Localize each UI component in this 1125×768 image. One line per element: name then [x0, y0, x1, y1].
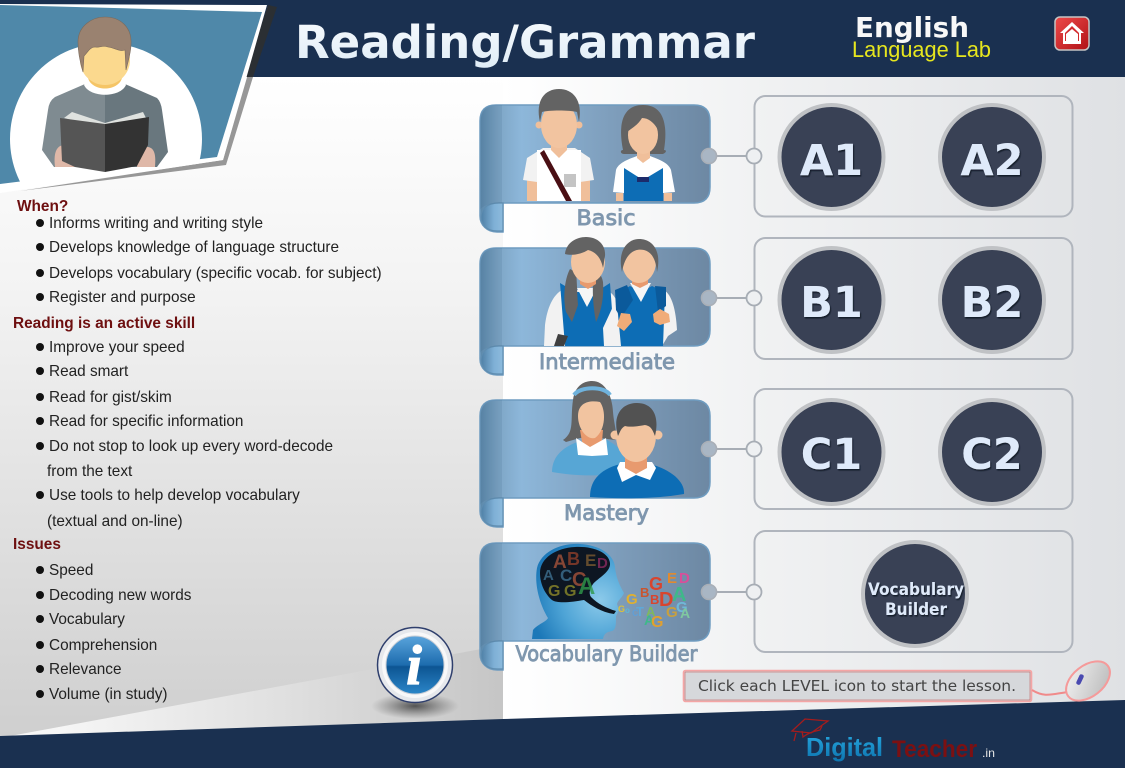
connector: mastery	[702, 442, 762, 456]
spoken letters: B	[650, 592, 659, 607]
scroll banner: basic	[480, 105, 710, 232]
spoken letters: E	[667, 570, 677, 587]
text block: issues	[13, 536, 192, 703]
icon: basic students	[523, 89, 675, 201]
button: vocabulary builder	[863, 542, 967, 646]
button: B2	[940, 248, 1044, 352]
brain letters: B	[567, 549, 580, 569]
button: B2: B2	[961, 278, 1023, 328]
logo: Digital Teacher	[792, 719, 995, 763]
panel: levels B	[754, 238, 1072, 359]
spoken letters: G	[676, 599, 688, 616]
brain letters	[543, 549, 608, 600]
spoken letters: A	[680, 605, 690, 621]
brain letters: C	[560, 566, 572, 585]
spoken letters: D	[679, 570, 690, 587]
brain letters: A	[543, 567, 554, 584]
button: C2	[940, 400, 1044, 504]
spoken letters: G	[649, 574, 663, 594]
brand: English Language Lab: Language Lab	[852, 37, 991, 62]
spoken letters: A	[672, 584, 686, 606]
brain letters: G	[548, 583, 560, 600]
list: issues items: Speed	[49, 562, 93, 579]
spoken letters: D	[659, 589, 673, 611]
spoken letters	[618, 570, 690, 631]
list: issues items: Comprehension	[49, 637, 157, 654]
scroll banner: mastery	[480, 400, 710, 527]
list: reading items: from the text	[47, 463, 133, 480]
spoken letters: B	[640, 585, 649, 600]
label: basic: Basic	[576, 206, 636, 230]
text block: reading is an active skill	[13, 315, 333, 530]
list: issues items: Vocabulary	[49, 611, 125, 628]
button: C1: C1	[801, 430, 862, 480]
button: A1: A1	[800, 136, 863, 186]
list: when items: Develops knowledge of language structure	[49, 239, 339, 256]
list: reading items: Read for specific information	[49, 413, 243, 430]
brain letters: C	[572, 569, 586, 591]
scroll banner: intermediate	[480, 248, 710, 375]
icon: info button	[371, 628, 459, 719]
logo: Digital Teacher: Digital	[806, 732, 883, 762]
spoken letters: G	[651, 614, 663, 631]
panel: intermediate	[480, 237, 710, 375]
button: A2: A2	[960, 136, 1024, 186]
label: intermediate: Intermediate	[539, 350, 675, 374]
panel: vocabulary builder level	[754, 531, 1072, 652]
brand: English Language Lab	[852, 11, 991, 62]
list: issues items: Volume (in study)	[49, 686, 168, 703]
brain letters: G	[564, 583, 576, 600]
list: when items: Informs writing and writing style	[49, 215, 263, 232]
connector: vocabulary builder	[702, 584, 762, 600]
icon: mastery people	[552, 381, 684, 498]
brand: English Language Lab: English	[855, 11, 969, 44]
spoken letters: G	[618, 604, 625, 614]
button: B1	[780, 248, 884, 352]
button: A2	[940, 105, 1044, 209]
brain letters: D	[597, 555, 608, 572]
label: mastery: Mastery	[564, 501, 649, 525]
list: reading items: Improve your speed	[49, 339, 185, 356]
spoken letters: T	[636, 604, 644, 619]
spoken letters: A	[646, 604, 656, 619]
panel: mastery	[480, 381, 710, 527]
list: issues items: Relevance	[49, 661, 122, 678]
icon: reader	[42, 17, 168, 172]
button: vocabulary builder: Builder	[885, 600, 948, 620]
heading: issues: Issues	[13, 536, 61, 553]
logo: Digital Teacher: .in	[982, 746, 995, 760]
icon: info button: i	[406, 635, 422, 697]
callout: click instruction: Click each LEVEL icon to start the lesson.	[698, 677, 1016, 695]
button: A1	[780, 105, 884, 209]
list: reading items	[36, 339, 333, 530]
panel: levels C	[754, 389, 1072, 509]
spoken letters: o	[625, 606, 630, 615]
icon: head with letters	[532, 544, 690, 639]
list: reading items: Use tools to help develop vocabulary	[49, 487, 300, 504]
icon: graduation cap	[792, 719, 828, 741]
panel: levels A	[754, 96, 1072, 216]
list: reading items: Do not stop to look up every word-decode	[49, 438, 333, 455]
button: C1	[780, 400, 884, 504]
list: issues items: Decoding new words	[49, 587, 192, 604]
brain letters: A	[553, 552, 567, 573]
spoken letters: C	[632, 608, 639, 618]
callout: click instruction	[684, 670, 1032, 702]
title: Reading/Grammar	[295, 16, 756, 69]
list: when items	[36, 215, 382, 306]
button: vocabulary builder: Vocabulary	[868, 580, 964, 600]
panel: basic	[480, 89, 710, 232]
spoken letters: G	[666, 604, 678, 621]
label: vocabulary builder: Vocabulary Builder	[516, 642, 698, 666]
text block: when	[17, 198, 382, 306]
icon: intermediate students	[544, 237, 677, 346]
list: reading items: Read for gist/skim	[49, 389, 172, 406]
list: reading items: (textual and on-line)	[47, 513, 183, 530]
logo: Digital Teacher: Teacher	[892, 736, 977, 763]
connector: intermediate	[702, 290, 762, 306]
brain letters: A	[578, 573, 595, 600]
heading: reading is an active skill: Reading is an active skill	[13, 315, 195, 332]
bottom footer bar	[0, 700, 1125, 768]
list: when items: Register and purpose	[49, 289, 196, 306]
icon: home button	[1055, 17, 1089, 50]
list: issues items	[36, 562, 192, 703]
button: C2: C2	[961, 430, 1023, 480]
button: B1: B1	[800, 278, 863, 328]
list: reading items: Read smart	[49, 363, 129, 380]
icon: mouse	[1032, 653, 1117, 709]
heading: when: When?	[17, 198, 68, 215]
spoken letters: A	[644, 612, 654, 628]
panel: vocabulary builder	[480, 543, 710, 670]
list: when items: Develops vocabulary (specific vocab. for subject)	[49, 265, 382, 282]
connector: basic	[702, 148, 762, 164]
spoken letters: G	[626, 591, 638, 608]
scroll banner: vocabulary builder	[480, 543, 710, 670]
photo frame: reader	[0, 4, 277, 191]
brain letters: E	[585, 551, 596, 570]
top header bar	[0, 0, 1125, 77]
